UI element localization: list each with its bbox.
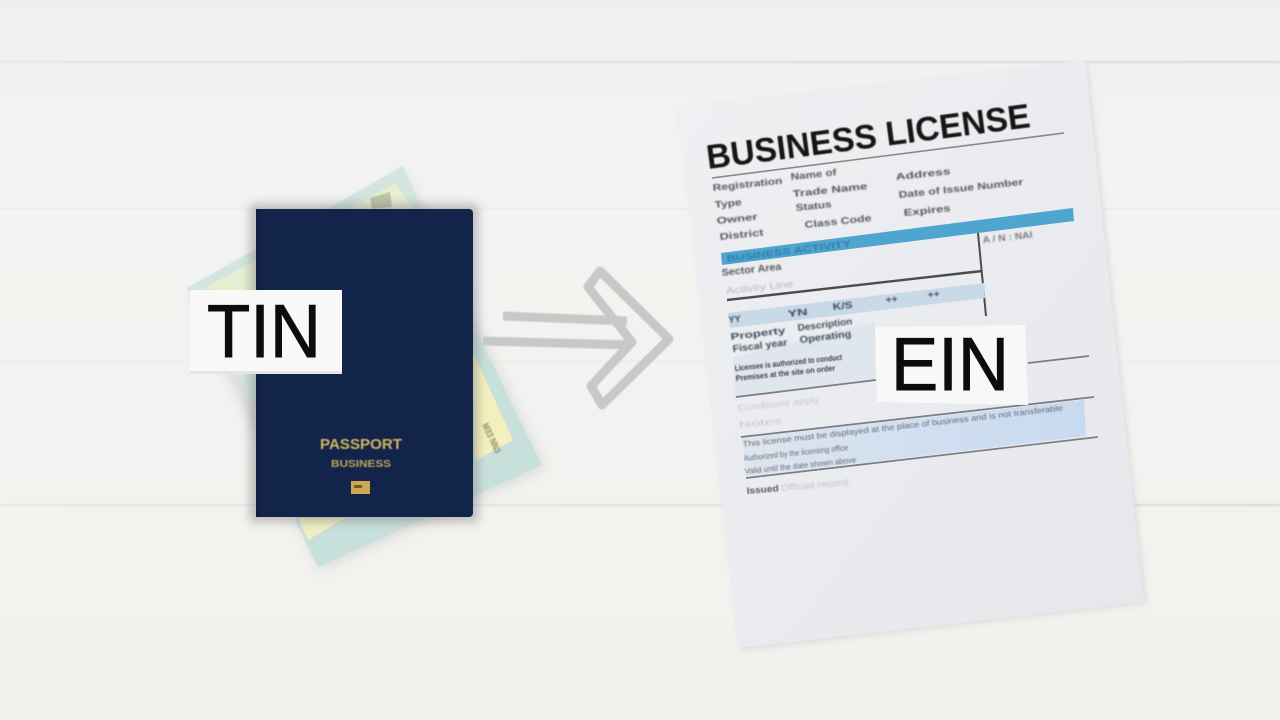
passport shadow	[250, 204, 478, 522]
faint table text: Activity Line	[725, 279, 794, 296]
EIN label: EIN	[891, 322, 1009, 406]
details text: District	[719, 227, 765, 243]
passport cover	[256, 209, 473, 517]
icon: gold passport emblem	[351, 481, 370, 494]
back document: pale green sheet	[187, 166, 421, 400]
passport gold title: PASSPORT	[320, 436, 402, 453]
table rows: Operating	[799, 329, 852, 346]
note text: Premises at the site on order	[735, 364, 836, 383]
table rows: YN	[787, 307, 808, 320]
details text: Trade Name	[792, 181, 868, 200]
TIN label: TIN	[207, 289, 321, 373]
details text: Expires	[903, 203, 951, 219]
details text: Status	[795, 199, 832, 214]
passport gold subtitle: BUSINESS	[331, 458, 391, 470]
details text: Type	[714, 197, 742, 211]
faint text: Notes	[738, 415, 784, 430]
faint text: Conditions apply	[737, 394, 820, 413]
details text: Address	[895, 166, 951, 183]
pale blue block behind rows	[733, 322, 875, 397]
arrow: grey double-line arrow pointing right	[483, 271, 669, 405]
shadow under passport documents	[190, 172, 545, 570]
table rows	[728, 289, 941, 355]
heading: BUSINESS LICENSE	[704, 97, 1032, 177]
table rows: Description	[797, 316, 853, 334]
details text: Date of Issue Number	[898, 177, 1024, 201]
heading rule	[712, 133, 1064, 178]
lower document: pale green sheet with yellow panel	[296, 335, 542, 567]
details text: Class Code	[804, 213, 872, 231]
note band text: Authorized by the licensing office	[743, 443, 849, 463]
band text: BUSINESS ACTIVITY	[726, 239, 851, 264]
business license document: Official record	[780, 477, 849, 493]
table rows: YY	[728, 314, 742, 326]
table label: Sector Area	[721, 262, 782, 279]
faint text	[737, 394, 820, 430]
details text: Registration	[712, 176, 783, 194]
passport group with documents	[187, 166, 545, 570]
pale blue table band	[728, 283, 985, 328]
table rows: ++	[927, 289, 941, 301]
note band text: This license must be displayed at the place of business and is not transferable	[742, 404, 1064, 449]
table rows: Fiscal year	[732, 337, 788, 355]
note text: Licensee is authorized to conduct	[734, 353, 843, 373]
footer text: Issued	[746, 483, 779, 496]
note text	[734, 353, 843, 383]
details text: Name of	[790, 167, 838, 183]
table rows: ++	[885, 294, 899, 306]
note band text	[742, 404, 1064, 476]
business license document	[678, 60, 1147, 651]
table rows: Property	[730, 325, 787, 343]
side text: A / N : NAI	[982, 230, 1033, 245]
note band text: Valid until the date shown above	[744, 455, 857, 476]
table rows: K/S	[832, 300, 853, 313]
pale blue note band	[742, 400, 1086, 477]
document shadow	[681, 64, 1147, 651]
details text: Owner	[716, 212, 759, 227]
details text	[712, 166, 1024, 243]
table frame lines	[727, 233, 986, 316]
document sheet	[678, 60, 1144, 648]
ruled lines	[736, 356, 1098, 478]
blue band	[721, 208, 1074, 265]
lower document: pale green sheet with yellow panel: M33 NN3	[480, 422, 503, 455]
